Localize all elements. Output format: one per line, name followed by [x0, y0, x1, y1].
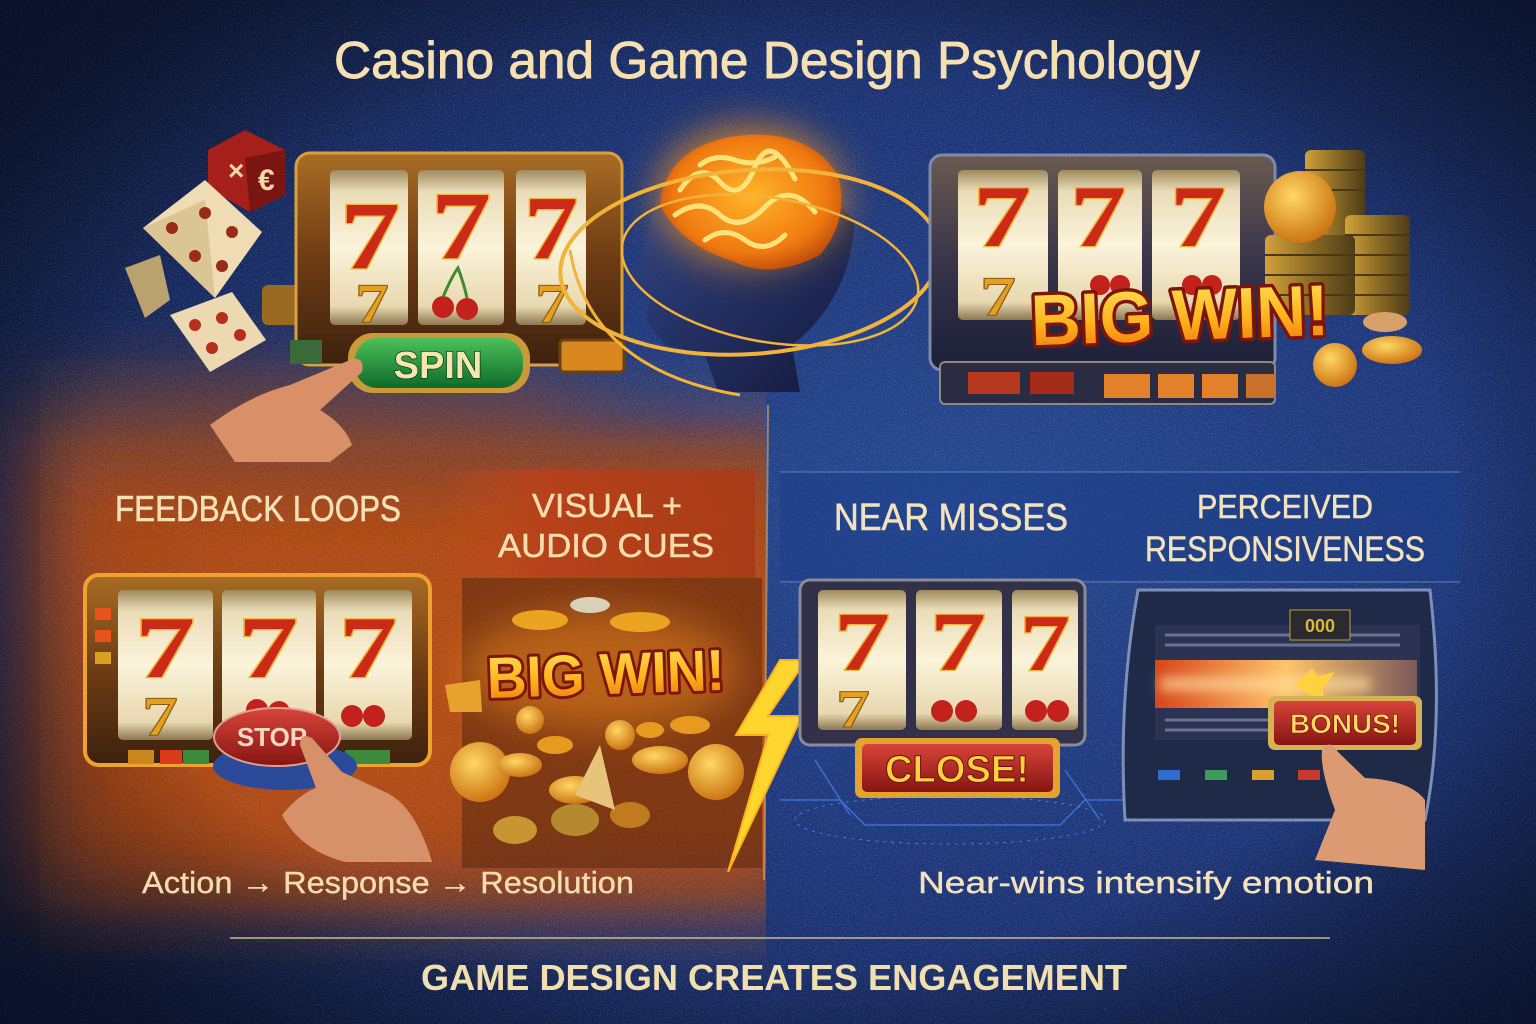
slot machine: feedback loops: 7 [142, 686, 178, 748]
machine: perceived responsiveness: 000 [1305, 616, 1335, 636]
big win banner: top: BIG WIN! [1030, 271, 1330, 361]
circuit lines [780, 760, 1130, 844]
slot machine: top left: 7 [535, 273, 569, 335]
slot machine: top left: 7 [524, 179, 578, 278]
button: bonus: BONUS! [1290, 709, 1400, 739]
hand: top left [210, 359, 362, 462]
panel: big win explosion [445, 578, 762, 868]
dice cluster [125, 130, 304, 372]
hand: stop button [282, 736, 432, 862]
center divider [764, 405, 768, 880]
slot machine: top left: 7 [340, 182, 400, 289]
panel: big win explosion: BIG WIN! [486, 638, 726, 711]
slot machine: top left: 7 [355, 273, 389, 335]
slot machine: near misses [800, 580, 1085, 745]
orbit rings [554, 157, 946, 395]
slot machine: top right: 7 [1170, 169, 1226, 266]
side panel lights [560, 340, 624, 372]
footer heading: GAME DESIGN CREATES ENGAGEMENT [421, 957, 1127, 998]
panel: visual and audio cues: AUDIO CUES [498, 527, 714, 564]
slot machine: near misses: 7 [834, 596, 890, 689]
coin stacks [1264, 150, 1422, 387]
slot machine: top right: 7 [1070, 169, 1126, 266]
slot machine: near misses: 7 [930, 596, 986, 689]
coins [445, 597, 744, 844]
slot machine: feedback loops [85, 575, 430, 765]
button: stop: STOP [237, 722, 307, 752]
button: bonus [1268, 696, 1422, 750]
hand: bonus button [1315, 744, 1425, 870]
dice cluster: € [258, 164, 275, 197]
button: SPIN: SPIN [394, 345, 482, 387]
panel: visual and audio cues: VISUAL + [532, 487, 682, 524]
heading: perceived responsiveness: RESPONSIVENESS [1145, 530, 1425, 569]
icon: lightning bolt [728, 660, 806, 872]
slot machine: near misses: 7 [1020, 600, 1070, 688]
divider: bottom [230, 937, 1330, 939]
slot machine: top right [930, 155, 1275, 370]
slot machine: feedback loops: 7 [135, 600, 195, 697]
head with brain [632, 127, 855, 392]
caption: near wins: Near-wins intensify emotion [918, 865, 1374, 900]
reels [330, 170, 586, 325]
brain [658, 127, 842, 270]
button: stop [213, 708, 357, 790]
heading: feedback loops: FEEDBACK LOOPS [115, 488, 401, 529]
slot machine: feedback loops: 7 [339, 600, 397, 697]
heading: near misses: NEAR MISSES [834, 497, 1068, 539]
button: close [855, 738, 1060, 798]
machine: perceived responsiveness [1123, 590, 1436, 820]
title: Casino and Game Design Psychology [334, 32, 1200, 90]
slot machine: top left [290, 153, 622, 365]
button: close: CLOSE! [885, 749, 1029, 791]
heading: perceived responsiveness [1145, 488, 1425, 569]
slot machine: top right: 7 [980, 266, 1016, 328]
caption: action response resolution: Action → Response → Resolution [142, 865, 634, 900]
panel: visual and audio cues [440, 470, 755, 578]
slot machine: feedback loops: 7 [238, 600, 298, 697]
dice cluster: × [228, 155, 244, 186]
button: SPIN [348, 333, 530, 393]
slot machine: top left: 7 [431, 172, 491, 279]
indicator lights: top right [940, 362, 1276, 404]
slot machine: top right: 7 [973, 169, 1031, 266]
heading: perceived responsiveness: PERCEIVED [1197, 488, 1373, 525]
heading band: right [780, 472, 1460, 582]
slot machine: near misses: 7 [836, 679, 870, 739]
